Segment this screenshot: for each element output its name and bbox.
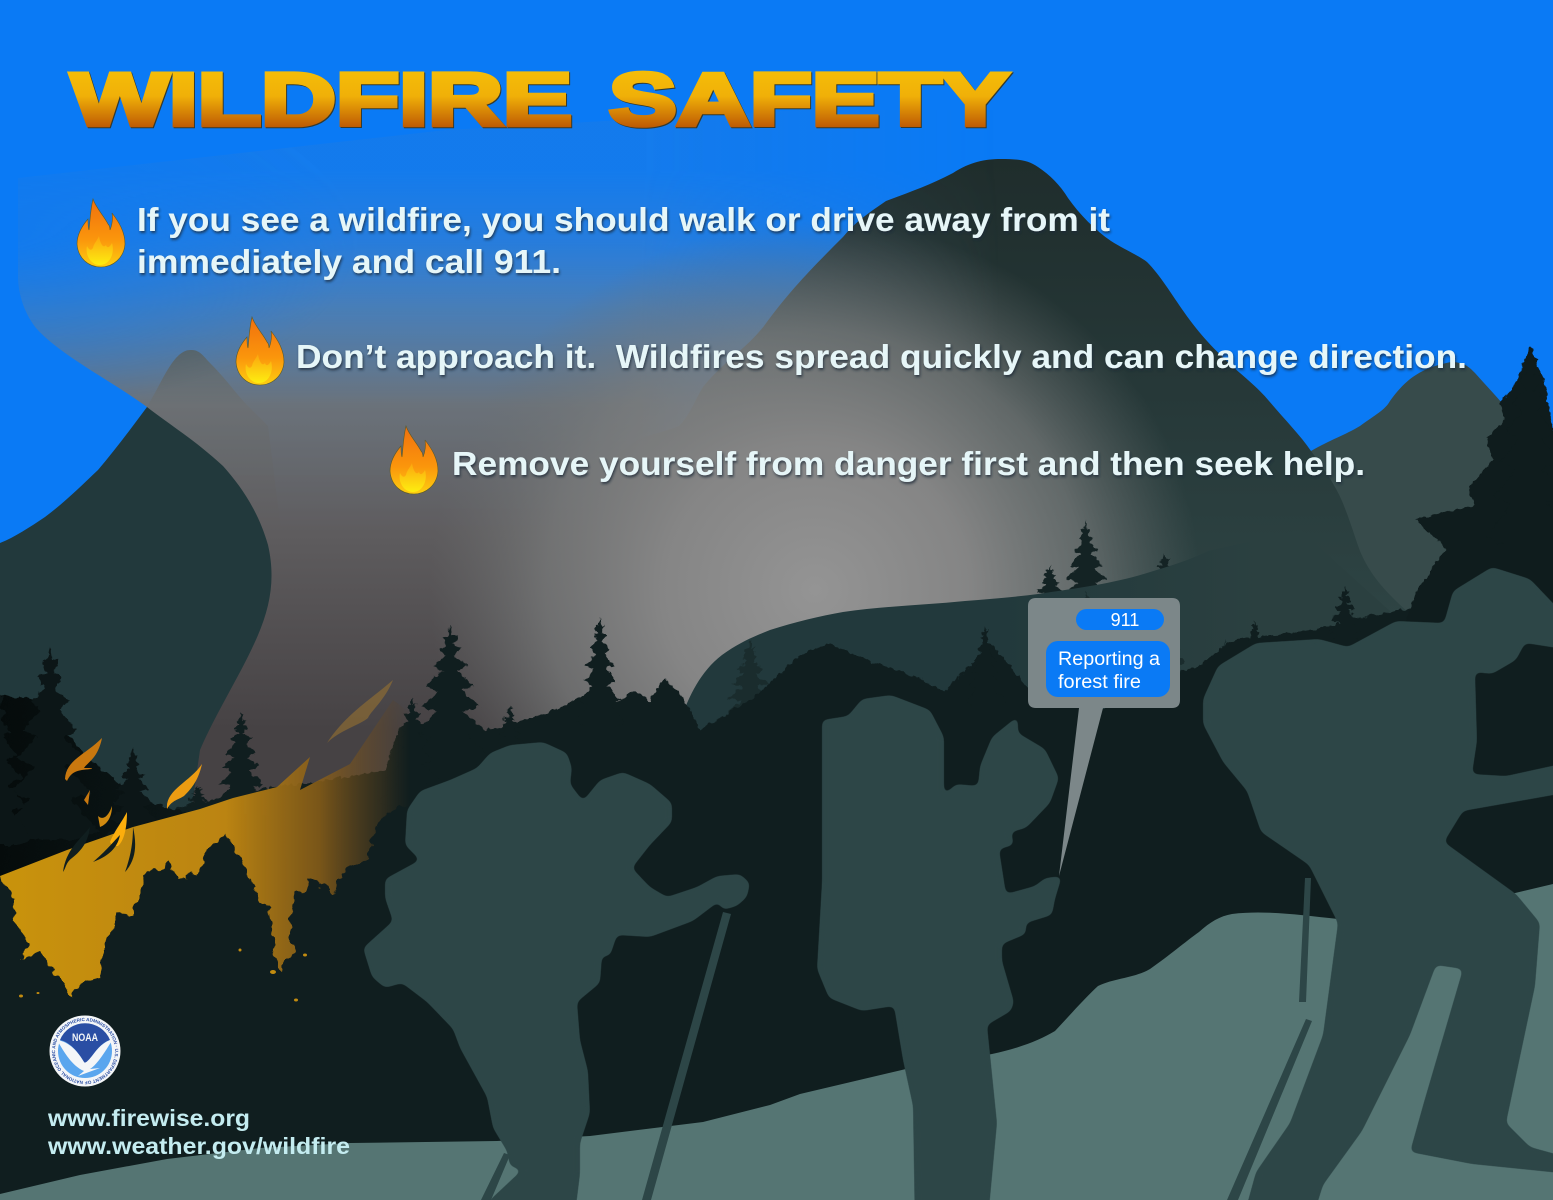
title: SAFETY xyxy=(609,58,1009,141)
centre conifers xyxy=(180,585,1369,820)
dark forest mass xyxy=(0,345,1553,1200)
ember speckles xyxy=(19,948,307,1002)
message bubble xyxy=(1046,641,1170,697)
911 pill: 911 xyxy=(1111,610,1139,630)
website links: www.firewise.org xyxy=(47,1105,250,1131)
centre mountain xyxy=(600,159,1415,820)
trees on ridge behind hill xyxy=(1026,521,1193,642)
safety tip 1: If you see a wildfire, you should walk or drive away from it xyxy=(137,202,1110,239)
safety tip 2: Don’t approach it. Wildfires spread quickly and can change direction. xyxy=(296,339,1467,376)
wildfire glow band xyxy=(0,700,420,1010)
mid hill xyxy=(680,530,1553,900)
safety tip 1: immediately and call 911. xyxy=(137,244,561,281)
flame icon 2 xyxy=(236,317,284,385)
title xyxy=(71,58,1009,141)
hiker: middle figure xyxy=(817,695,1062,1200)
right conifers xyxy=(1405,345,1553,625)
left mountain xyxy=(0,350,290,900)
hiker: left figure xyxy=(363,742,750,1200)
flame icon 3 xyxy=(390,426,438,494)
911 pill xyxy=(1076,609,1164,630)
foreground tree line xyxy=(0,800,440,1200)
left conifers xyxy=(0,645,163,845)
NOAA logo xyxy=(50,1016,120,1086)
fire flames xyxy=(63,680,393,872)
NOAA logo: NATIONAL OCEANIC AND ATMOSPHERIC ADMINISTRATION · U.S. DEPARTMENT OF COMMERCE xyxy=(52,1018,118,1084)
safety tip 3: Remove yourself from danger first and then seek help. xyxy=(452,446,1365,483)
flame icon 1 xyxy=(77,199,125,267)
website links xyxy=(47,1105,350,1159)
title: WILDFIRE xyxy=(71,58,572,141)
safety tip 1 xyxy=(137,202,1110,281)
trekking poles xyxy=(642,912,731,1200)
phone speech bubble xyxy=(1028,598,1180,876)
message bubble: Reporting a xyxy=(1058,649,1160,670)
smoke cloud xyxy=(18,116,1179,803)
hill trees, lighter xyxy=(718,590,1303,740)
website links: www.weather.gov/wildfire xyxy=(47,1133,350,1159)
hiker: right figure xyxy=(1203,567,1553,1200)
right distant mountain xyxy=(1311,362,1553,800)
right hiker poles xyxy=(1227,1019,1312,1200)
ground slope xyxy=(0,884,1553,1200)
NOAA logo: NOAA xyxy=(72,1032,98,1044)
message bubble: forest fire xyxy=(1058,672,1141,693)
